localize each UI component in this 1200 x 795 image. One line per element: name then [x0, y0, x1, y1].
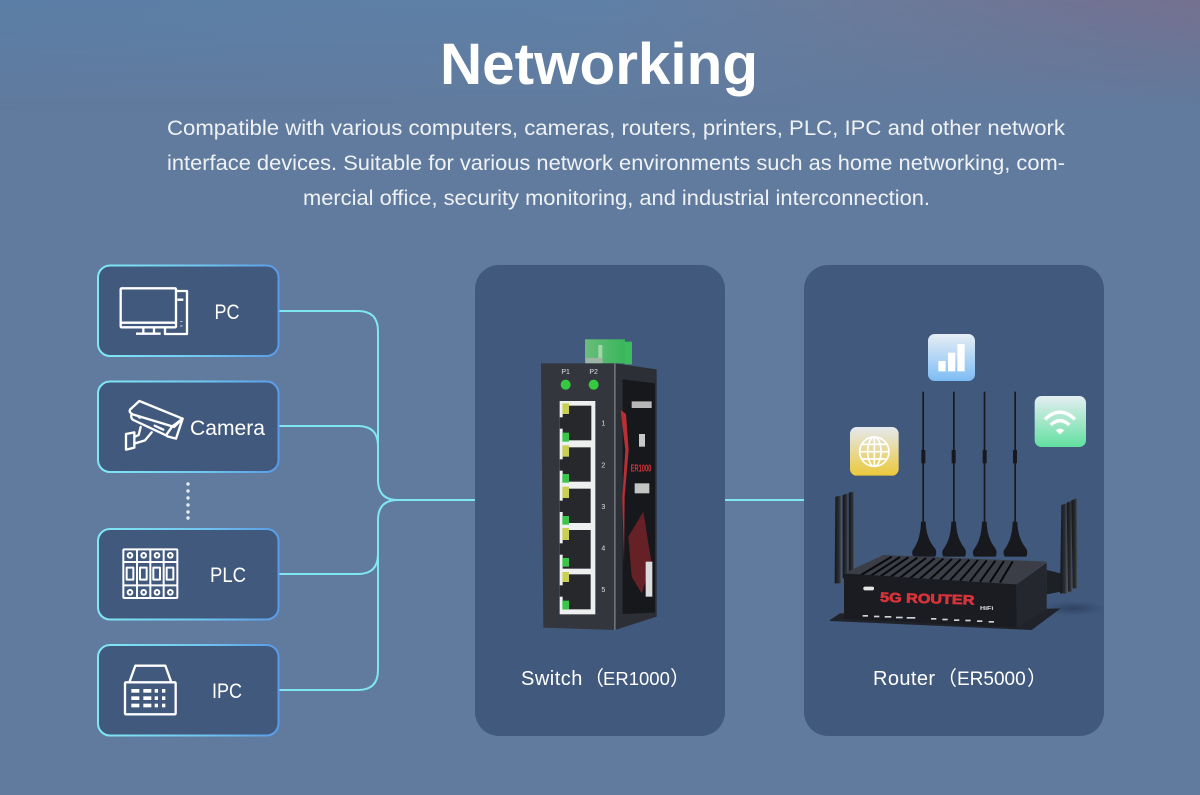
router front [844, 573, 1017, 628]
app icon: signal bars [928, 334, 975, 381]
side connectors [1040, 570, 1061, 594]
router brand text: 5G ROUTER [880, 590, 975, 608]
top antennas [912, 392, 1027, 557]
device box: IPC [98, 645, 278, 736]
label: switch: （ [584, 667, 604, 690]
label: router: （ [937, 667, 957, 690]
label: switch: ） [670, 667, 690, 690]
label: switch: ER1000 [603, 668, 670, 689]
switch device illustration: ER1000 [631, 463, 652, 474]
router LEDs [863, 615, 994, 623]
connector line switch to router [725, 499, 804, 501]
RJ45 ports [560, 401, 595, 614]
device box: Camera [98, 382, 278, 472]
label: IPC: IPC [212, 680, 242, 703]
description text [167, 117, 1066, 210]
icon: Camera [126, 401, 183, 450]
label: PLC: PLC [210, 564, 246, 587]
label: PC: PC [214, 301, 240, 324]
switch device illustration: P1 [561, 369, 570, 376]
right antennas [1060, 498, 1078, 593]
switch side face [615, 363, 657, 630]
port numbers [601, 421, 605, 594]
description text: interface devices. Suitable for various network environments such as home networking, com- [167, 152, 1065, 175]
icon: PLC [123, 549, 177, 598]
left antennas [835, 492, 855, 583]
device box: PC [98, 266, 278, 356]
label: router: ） [1027, 667, 1047, 690]
port numbers: 1 [601, 421, 605, 428]
router illustration [830, 334, 1105, 630]
switch device illustration: P2 [589, 369, 598, 376]
label: Camera: Camera [190, 417, 265, 440]
app icon: wifi [1035, 396, 1086, 447]
port numbers: 3 [601, 504, 605, 511]
icon: IPC [125, 666, 176, 714]
base flange [830, 608, 1061, 630]
panel: switch [475, 265, 725, 736]
panel: router [804, 265, 1105, 736]
router top [844, 555, 1047, 584]
device box: PLC [98, 529, 278, 620]
switch front face [541, 363, 615, 630]
router illustration: HiFi [980, 606, 994, 612]
LEDs [561, 380, 571, 390]
app icon: globe [850, 427, 899, 476]
port numbers: 2 [601, 462, 605, 469]
title: Networking [440, 32, 758, 97]
background [820, 0, 1200, 64]
description text: Compatible with various computers, cameras, routers, printers, PLC, IPC and other network [167, 117, 1066, 140]
icon: PC [121, 288, 187, 334]
label: switch: Switch [521, 668, 583, 690]
port numbers: 5 [601, 587, 605, 594]
description text: mercial office, security monitoring, and industrial interconnection. [303, 187, 930, 210]
label: router: Router [873, 668, 935, 690]
green terminal block [585, 339, 632, 364]
port numbers: 4 [601, 545, 605, 552]
connector lines from devices to switch [279, 311, 475, 690]
router shadow [1042, 601, 1105, 616]
vertical ellipsis dots [186, 482, 190, 520]
label: router: ER5000 [957, 669, 1026, 690]
switch device illustration [541, 339, 657, 630]
